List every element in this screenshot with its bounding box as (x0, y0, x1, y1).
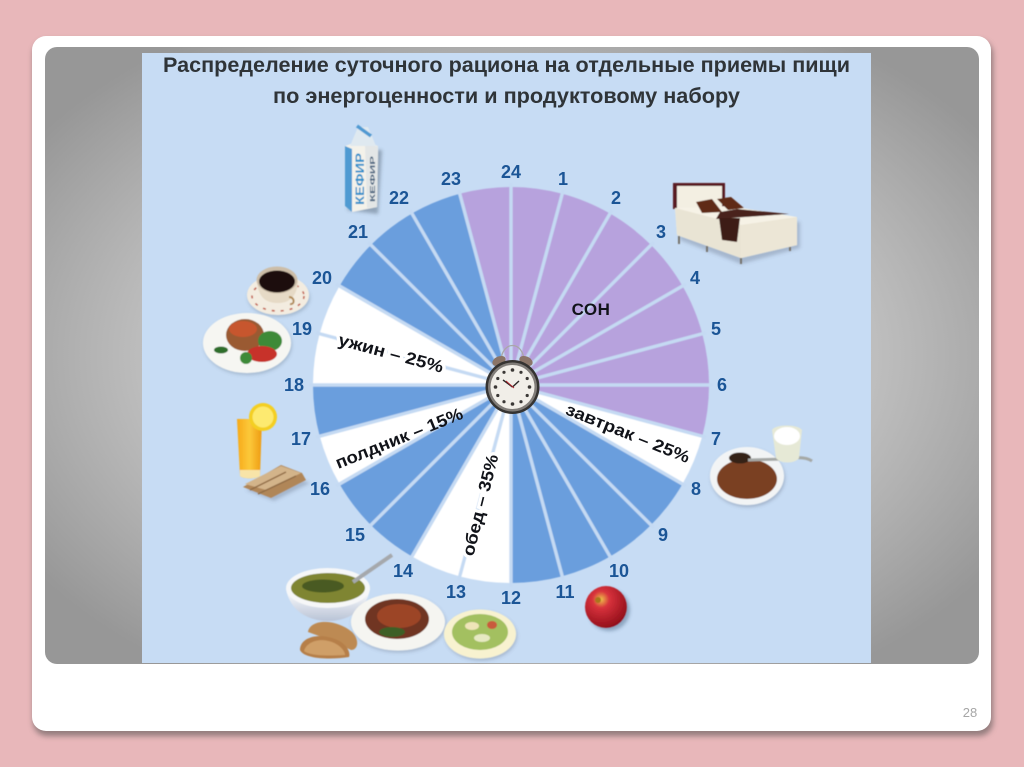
hour numbers: 24 (501, 162, 521, 182)
page number: 28 (963, 705, 977, 720)
sector: snack (320, 385, 511, 484)
icon: bread (300, 622, 357, 659)
sector labels: СОН (572, 300, 610, 319)
icon: alarm clock (486, 346, 540, 414)
sector labels: обед – 35% (459, 452, 502, 558)
sector: lunch (412, 385, 511, 583)
sector labels (333, 300, 693, 558)
hour numbers: 3 (656, 222, 666, 242)
icon: coffee cup (247, 266, 310, 317)
sector: evening (340, 194, 511, 385)
icon: apple (585, 586, 630, 631)
title (163, 54, 850, 108)
icon: bed (673, 183, 800, 264)
hour numbers: 7 (711, 429, 721, 449)
icon: dinner plate (203, 313, 292, 375)
hour numbers: 17 (291, 429, 311, 449)
hour numbers: 22 (389, 188, 409, 208)
hour numbers: 11 (555, 582, 575, 602)
hour numbers: 18 (284, 375, 304, 395)
hour numbers: 8 (691, 479, 701, 499)
title: по энергоценности и продуктовому набору (273, 85, 740, 108)
sector labels: ужин – 25% (336, 330, 445, 377)
hour numbers: 5 (711, 319, 721, 339)
hour numbers: 12 (501, 588, 521, 608)
hour numbers: 6 (717, 375, 727, 395)
hour numbers: 14 (393, 561, 413, 581)
sector: hour 17-18 (313, 385, 511, 436)
hour numbers: 19 (292, 319, 312, 339)
sector: breakfast (511, 385, 702, 484)
icon: salad plate (444, 610, 517, 660)
icon: kefir carton: КЕФИР (353, 153, 367, 205)
hour numbers: 4 (690, 268, 700, 288)
icon: kefir carton: КЕФИР (370, 155, 377, 202)
image background (142, 53, 871, 663)
icon: porridge bowl (710, 447, 812, 507)
hour numbers: 20 (312, 268, 332, 288)
hour numbers: 23 (441, 169, 461, 189)
hour numbers: 9 (658, 525, 668, 545)
icon: juice and lemon (237, 403, 277, 478)
sector: afternoon (340, 385, 511, 556)
sector: dinner (313, 286, 511, 385)
sector: sleep (460, 187, 709, 436)
icon: glass of milk (772, 426, 802, 462)
hour numbers: 15 (345, 525, 365, 545)
icon: soup bowl (286, 555, 392, 621)
hour numbers: 1 (558, 169, 568, 189)
hour numbers: 16 (310, 479, 330, 499)
sector labels: полдник – 15% (333, 404, 466, 473)
icon: crackers (243, 465, 310, 501)
title: Распределение суточного рациона на отдельные приемы пищи (163, 54, 850, 77)
icon: meat plate (351, 594, 446, 652)
hour numbers: 21 (348, 222, 368, 242)
hour numbers (284, 162, 727, 608)
hour numbers: 10 (609, 561, 629, 581)
gray panel (45, 47, 979, 664)
sector: morning (511, 385, 682, 583)
hour numbers: 2 (611, 188, 621, 208)
icon: kefir carton (345, 126, 382, 214)
hour numbers: 13 (446, 582, 466, 602)
sector labels: завтрак – 25% (563, 400, 693, 467)
chart: 24-hour wheel (309, 183, 713, 587)
